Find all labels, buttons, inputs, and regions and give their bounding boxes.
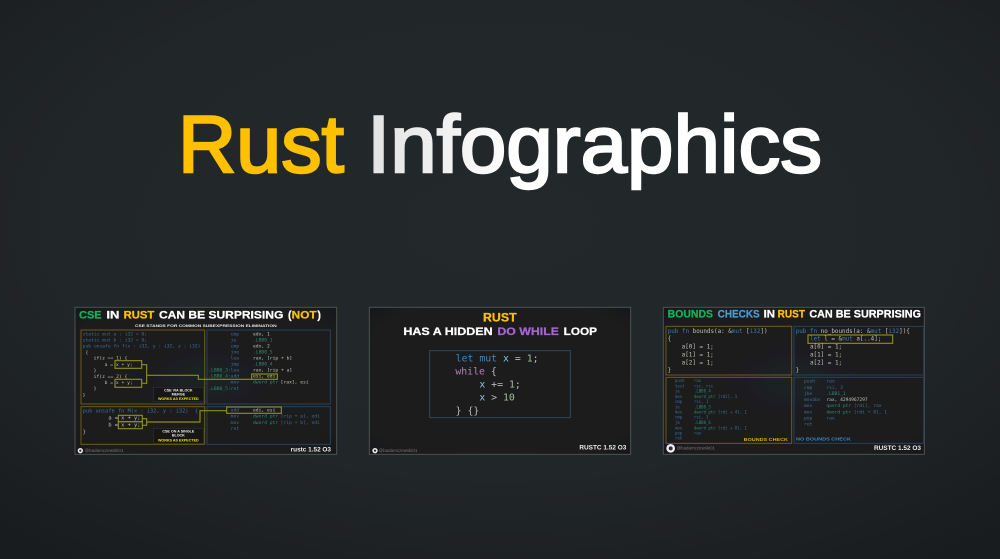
- assembly box: block merge: esi, edi: [253, 374, 276, 380]
- assembly box: bounds check: [666, 377, 792, 443]
- code box: block merge source: [81, 330, 205, 404]
- assembly box: no bounds check: jbe: [804, 391, 813, 397]
- heading: Rust has a hidden do while loop: DO WHILE: [497, 326, 559, 338]
- assembly box: bounds check: .LBB0_6: [694, 420, 711, 425]
- code box: bounds: a[0] = 1;: [682, 344, 714, 351]
- heading: CSE in Rust can be surprising: [79, 309, 321, 321]
- assembly box: bounds check: rax: [694, 378, 702, 383]
- assembly box: single block: mov: [231, 421, 239, 426]
- label: no bounds check: NO BOUNDS CHECK: [796, 437, 851, 443]
- callout: block merge: CSE VIA BLOCK: [164, 388, 193, 392]
- assembly box: block merge: .LBB0_1: [253, 337, 273, 343]
- callout: block merge: MERGE: [172, 393, 186, 397]
- version label: rustc 1.52 O3: [291, 446, 331, 453]
- assembly box: no bounds check: rax: [826, 416, 835, 421]
- assembly box: bounds check: rsi, 3: [694, 415, 709, 420]
- code box: no bounds: pub fn no_bounds(a: &mut [i32]){: [796, 328, 910, 335]
- callout: single block: [153, 428, 203, 443]
- assembly box: bounds check: ret: [675, 436, 682, 441]
- assembly box: block merge: .LBB0_4:: [208, 374, 231, 380]
- assembly box: bounds check: mov: [675, 410, 683, 415]
- assembly box: block merge: .LBB0_4: [253, 362, 273, 368]
- heading: Bounds checks in Rust can be surprising: IN: [764, 309, 775, 321]
- heading: Rust has a hidden do while loop: RUST: [483, 311, 517, 325]
- assembly box: block merge: .LBB0_5:: [208, 386, 231, 392]
- highlight connectors: [115, 361, 281, 429]
- twitter handle: [666, 444, 716, 453]
- assembly box: block merge: add: [231, 374, 239, 380]
- assembly box: single block: add: [231, 408, 239, 414]
- assembly box: no bounds check: rax, 4294967297: [826, 397, 868, 403]
- code box: block merge source: {: [83, 350, 88, 356]
- heading: CSE in Rust can be surprising: CSE: [79, 309, 102, 321]
- twitter handle: @badamczewski01: [677, 446, 716, 451]
- assembly box: bounds check: mov: [675, 425, 683, 430]
- assembly box: single block: mov: [231, 415, 239, 420]
- assembly box: bounds check: jb: [675, 420, 680, 425]
- panel: CSE in Rust: [75, 307, 337, 454]
- assembly box: no bounds check: mov: [804, 410, 813, 415]
- twitter handle: @badamczewski01: [85, 448, 124, 453]
- assembly box: block merge: ret: [231, 386, 239, 392]
- assembly box: no bounds check: rax: [826, 380, 835, 385]
- assembly box: no bounds check: push: [804, 379, 815, 385]
- callout: block merge: [153, 387, 203, 402]
- code box: no bounds: [794, 326, 924, 375]
- assembly box: bounds check: rsi, 1: [694, 399, 709, 404]
- code box: block merge source: pub unsafe fn f(x : i32, y : i32, z : i32): [83, 344, 200, 350]
- heading: Bounds checks in Rust can be surprising: RUST: [778, 309, 805, 321]
- assembly box: no bounds check: .LBB1_1: [826, 391, 846, 397]
- code box: do while: [430, 351, 570, 418]
- assembly box: no bounds check: movabs: [804, 397, 821, 403]
- code box: do while: } {}: [456, 406, 479, 417]
- heading: Rust has a hidden do while loop: HAS A HIDDEN: [403, 326, 493, 338]
- assembly box: no bounds check: mov: [804, 404, 813, 409]
- assembly box: bounds check: rsi, rsi: [694, 384, 714, 389]
- code box: no bounds: }: [796, 367, 799, 374]
- assembly box: block merge: cmp: [231, 332, 239, 337]
- callout: block merge: WORKS AS EXPECTED: [158, 397, 199, 401]
- assembly box: bounds check: dword ptr [rdi + 4], 1: [694, 410, 747, 415]
- assembly box: bounds check: cmp: [675, 415, 683, 420]
- heading: CSE in Rust can be surprising: NOT: [292, 309, 317, 321]
- assembly box: bounds check: cmp: [675, 399, 683, 404]
- heading: Rust has a hidden do while loop: LOOP: [564, 326, 597, 338]
- assembly box: bounds check: je: [675, 404, 680, 409]
- heading: Rust has a hidden do while loop: [403, 311, 597, 338]
- heading: CSE in Rust can be surprising: IN: [106, 309, 119, 321]
- code box: single block source: b = x + y;: [108, 422, 140, 428]
- panel: hidden do while loop: [369, 307, 631, 454]
- callout: single block: CSE ON A SINGLE: [162, 429, 195, 433]
- assembly box: block merge: cmp: [231, 344, 239, 349]
- code box: block merge source: if(z == 2) {: [94, 374, 128, 380]
- code box: do while: let mut x = 1;: [456, 353, 539, 364]
- assembly box: block merge: rax, [rip + a]: [253, 368, 292, 374]
- assembly box: bounds check: dword ptr [rdi + 8], 1: [694, 425, 747, 430]
- code box: single block source: pub unsafe fn M(x : i32, y : i32) {: [83, 409, 198, 415]
- heading: Bounds checks in Rust can be surprising: BOUNDS: [668, 309, 713, 321]
- twitter handle: @badamczewski01: [379, 448, 418, 453]
- code box: single block source: a = x + y;: [108, 415, 140, 421]
- assembly box: bounds check: .LBB0_5: [694, 404, 711, 409]
- assembly box: single block: [rip + b], edi: [281, 420, 320, 426]
- assembly box: block merge: .LBB0_3:: [208, 368, 231, 374]
- title: Rust: [178, 100, 344, 190]
- assembly box: single block: dword ptr: [253, 420, 278, 426]
- callout: single block: BLOCK: [172, 434, 185, 438]
- heading: Bounds checks in Rust can be surprising: CHECKS: [718, 309, 760, 321]
- assembly box: bounds check: pop: [675, 430, 683, 435]
- code box: block merge source: }: [94, 386, 97, 392]
- code box: no bounds: a[1] = 1;: [810, 352, 842, 359]
- heading: CSE in Rust can be surprising: RUST: [124, 309, 155, 321]
- assembly box: no bounds check: ret: [804, 421, 813, 427]
- code box: do while: x += 1;: [479, 380, 521, 391]
- assembly box: block merge: [rax], esi: [281, 380, 309, 386]
- code box: bounds: }: [668, 367, 671, 374]
- assembly box: block merge: dword ptr: [253, 380, 278, 386]
- assembly box: no bounds check: [794, 377, 924, 443]
- assembly box: block merge: lea: [231, 368, 239, 374]
- code box: single block source: }: [83, 429, 86, 435]
- code box: bounds: a[2] = 1;: [682, 360, 714, 367]
- code box: block merge source: if(z == 1) {: [94, 356, 128, 362]
- code box: block merge source: static mut b : i32 = 0;: [83, 338, 147, 344]
- assembly box: block merge: rax, [rip + b]: [253, 355, 292, 361]
- assembly box: single block: [rip + a], edi: [281, 414, 320, 420]
- label: bounds check: BOUNDS CHECK: [744, 437, 788, 443]
- assembly box: block merge: lea: [231, 355, 239, 361]
- assembly box: block merge: .LBB0_5: [253, 349, 273, 355]
- title: [178, 100, 822, 190]
- assembly box: block merge: je: [231, 337, 236, 343]
- assembly box: bounds check: mov: [675, 394, 683, 399]
- code box: no bounds: a[2] = 1;: [810, 360, 842, 367]
- assembly box: block merge: jmp: [231, 362, 239, 368]
- code box: no bounds: a[0] = 1;: [810, 344, 842, 351]
- assembly box: single block: dword ptr: [253, 414, 278, 420]
- code box: block merge source: static mut a : i32 = 0;: [83, 331, 147, 337]
- assembly box: bounds check: je: [675, 389, 680, 394]
- assembly box: no bounds check: cmp: [804, 386, 813, 391]
- assembly box: bounds check: .LBB0_4: [694, 389, 711, 394]
- heading: CSE in Rust can be surprising: ): [317, 309, 321, 321]
- assembly box: block merge: jne: [231, 349, 239, 355]
- code box: block merge source: }: [94, 368, 97, 374]
- panel: bounds checks: [663, 307, 924, 454]
- callout: single block: WORKS AS EXPECTED: [158, 438, 199, 442]
- assembly box: no bounds check: dword ptr [rdi + 8], 1: [826, 409, 887, 415]
- assembly box: single block: [207, 407, 330, 444]
- assembly box: bounds check: push: [675, 378, 685, 383]
- assembly box: no bounds check: qword ptr [rdi], rax: [826, 403, 882, 409]
- code box: bounds: [666, 326, 792, 375]
- code box: do while: x > 10: [479, 393, 515, 404]
- heading: Bounds checks in Rust can be surprising: CAN BE SURPRISING: [809, 309, 921, 321]
- code box: block merge source: a = x + y;: [105, 363, 133, 368]
- assembly box: block merge: mov: [231, 381, 239, 386]
- assembly box: bounds check: test: [675, 384, 685, 389]
- version label: RUSTC 1.52 O3: [874, 445, 921, 452]
- code box: block merge source: }: [83, 392, 86, 398]
- code box: single block source: [81, 407, 205, 444]
- heading: CSE in Rust can be surprising: CAN BE SURPRISING: [159, 309, 283, 321]
- assembly box: no bounds check: rsi, 3: [826, 385, 843, 391]
- assembly box: single block: edi, esi: [253, 408, 276, 414]
- subtitle: CSE STANDS FOR COMMON SUBEXPRESSION ELIMINATION: [135, 324, 277, 328]
- code box: do while: while {: [455, 367, 497, 378]
- code box: no bounds: let l = &mut a[..4];: [810, 336, 881, 343]
- heading: Bounds checks in Rust can be surprising: [668, 309, 921, 321]
- assembly box: block merge: edx, 2: [253, 343, 270, 349]
- title: Infographics: [367, 100, 822, 190]
- code box: block merge source: b = x + y;: [105, 380, 133, 386]
- assembly box: block merge: edx, 1: [253, 331, 270, 337]
- assembly box: bounds check: rax: [694, 430, 702, 435]
- assembly box: block merge: [207, 330, 330, 404]
- heading: CSE in Rust can be surprising: (: [288, 309, 292, 321]
- version label: RUSTC 1.52 O3: [579, 445, 627, 452]
- code box: bounds: a[1] = 1;: [682, 352, 714, 359]
- code box: bounds: pub fn bounds(a: &mut [i32]): [668, 328, 768, 335]
- assembly box: no bounds check: pop: [804, 416, 813, 421]
- assembly box: single block: ret: [231, 426, 239, 432]
- assembly box: bounds check: dword ptr [rdi], 1: [694, 394, 738, 399]
- code box: bounds: {: [668, 336, 671, 343]
